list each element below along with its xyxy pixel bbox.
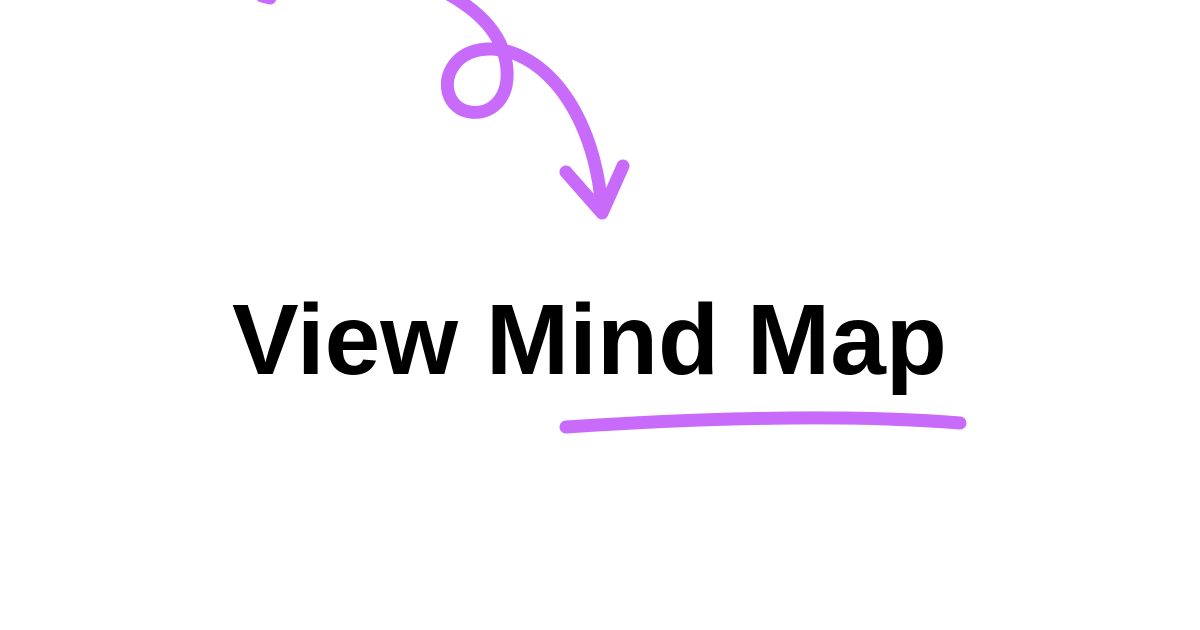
underline xyxy=(566,418,960,427)
arrow: curly pointer xyxy=(262,0,623,213)
title: View Mind Map xyxy=(232,284,947,396)
